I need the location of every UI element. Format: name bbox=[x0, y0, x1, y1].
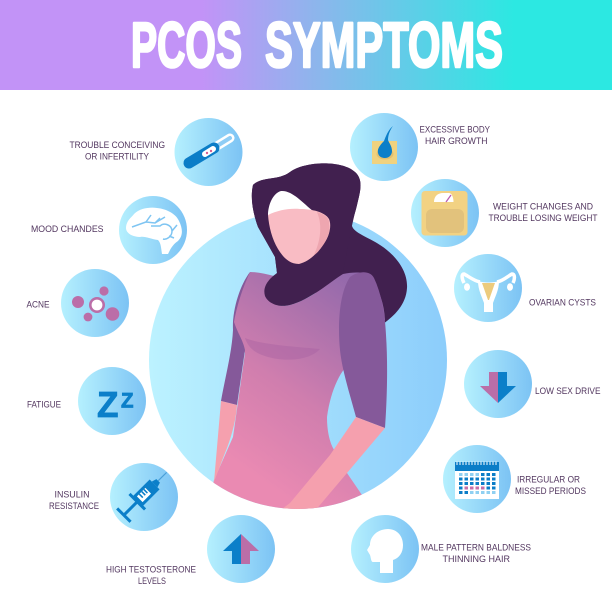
label: OR INFERTILITY bbox=[85, 150, 150, 161]
item: ovarian cysts bbox=[454, 254, 596, 322]
item: low sex drive bbox=[464, 350, 600, 418]
label: TROUBLE LOSING WEIGHT bbox=[488, 212, 598, 223]
icon: brain bbox=[126, 208, 182, 254]
item: irregular periods bbox=[443, 445, 586, 513]
label: HIGH TESTOSTERONE bbox=[106, 564, 196, 574]
item: mood changes bbox=[31, 196, 187, 264]
item: acne bbox=[26, 269, 129, 337]
label: THINNING HAIR bbox=[442, 553, 510, 564]
label: ACNE bbox=[26, 298, 50, 310]
item: insulin resistance bbox=[49, 463, 178, 531]
item: male pattern baldness bbox=[351, 515, 531, 583]
label: FATIGUE bbox=[27, 398, 61, 410]
icon: Zz: Z bbox=[97, 384, 118, 425]
label: LOW SEX DRIVE bbox=[535, 385, 600, 396]
icon: pimples bbox=[72, 286, 119, 321]
item: weight changes bbox=[411, 179, 598, 247]
label: WEIGHT CHANGES AND bbox=[493, 200, 593, 212]
icon: syringe bbox=[115, 465, 174, 524]
label bbox=[488, 200, 598, 223]
item: body hair bbox=[350, 113, 491, 181]
icon: hair follicle bbox=[372, 126, 397, 164]
label: TROUBLE CONCEIVING bbox=[70, 139, 165, 150]
header banner bbox=[0, 0, 612, 90]
label: IRREGULAR OR bbox=[517, 474, 580, 485]
hijab back bbox=[252, 163, 407, 324]
face opening bbox=[268, 191, 313, 220]
item: infertility bbox=[70, 118, 242, 186]
icon: Zz: Z bbox=[121, 390, 134, 412]
right sleeve bbox=[339, 272, 387, 428]
icon: Zz bbox=[97, 384, 134, 425]
central circle with woman figure bbox=[149, 163, 447, 515]
label: MISSED PERIODS bbox=[515, 485, 586, 496]
hijab front wrap bbox=[252, 163, 361, 306]
label: MOOD CHANDES bbox=[31, 223, 104, 234]
face bbox=[268, 209, 330, 264]
icon: pregnancy test bbox=[189, 138, 230, 163]
icon: bathroom scale bbox=[422, 191, 468, 236]
label bbox=[70, 139, 165, 161]
label bbox=[421, 542, 531, 564]
label: HAIR GROWTH bbox=[425, 135, 488, 146]
item: fatigue bbox=[27, 367, 146, 435]
label: RESISTANCE bbox=[49, 500, 99, 511]
face shadow bbox=[314, 212, 330, 255]
left forearm bbox=[214, 401, 237, 482]
dress torso bbox=[205, 272, 385, 515]
label: INSULIN bbox=[54, 489, 90, 500]
label bbox=[515, 474, 586, 496]
icon: down arrow bbox=[480, 372, 516, 403]
label: OVARIAN CYSTS bbox=[529, 296, 596, 308]
label bbox=[49, 489, 99, 511]
icon: uterus bbox=[462, 274, 514, 312]
label: EXCESSIVE BODY bbox=[420, 124, 491, 134]
icon: head silhouette bbox=[367, 529, 403, 573]
bust shadow bbox=[245, 338, 320, 360]
item: high testosterone bbox=[106, 515, 275, 586]
label: MALE PATTERN BALDNESS bbox=[421, 542, 531, 553]
icon: up arrow bbox=[223, 534, 259, 564]
title: PCOS bbox=[131, 9, 242, 81]
label bbox=[420, 124, 491, 146]
left sleeve bbox=[221, 272, 250, 405]
right forearm bbox=[278, 417, 385, 512]
title bbox=[131, 9, 503, 81]
icon: calendar bbox=[455, 462, 499, 499]
label: LEVELS bbox=[138, 575, 166, 586]
label bbox=[106, 564, 196, 586]
